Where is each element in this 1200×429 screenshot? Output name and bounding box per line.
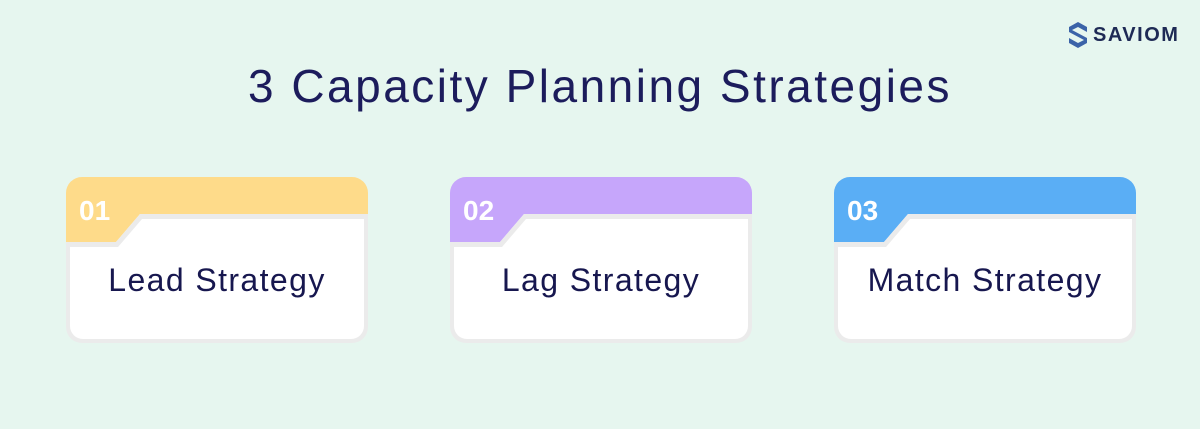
card 2	[450, 177, 752, 343]
card 3	[834, 177, 1136, 343]
card 2: 02	[463, 195, 494, 226]
card 3: 03	[847, 195, 878, 226]
title: 3 Capacity Planning Strategies	[248, 60, 952, 112]
logo: SAVIOM	[1093, 24, 1179, 46]
card 1: 01	[79, 195, 110, 226]
card 1: Lead Strategy	[108, 262, 326, 298]
card 1	[66, 177, 368, 343]
card 3: Match Strategy	[868, 262, 1102, 298]
logo	[1069, 22, 1179, 48]
card 2: Lag Strategy	[502, 262, 700, 298]
